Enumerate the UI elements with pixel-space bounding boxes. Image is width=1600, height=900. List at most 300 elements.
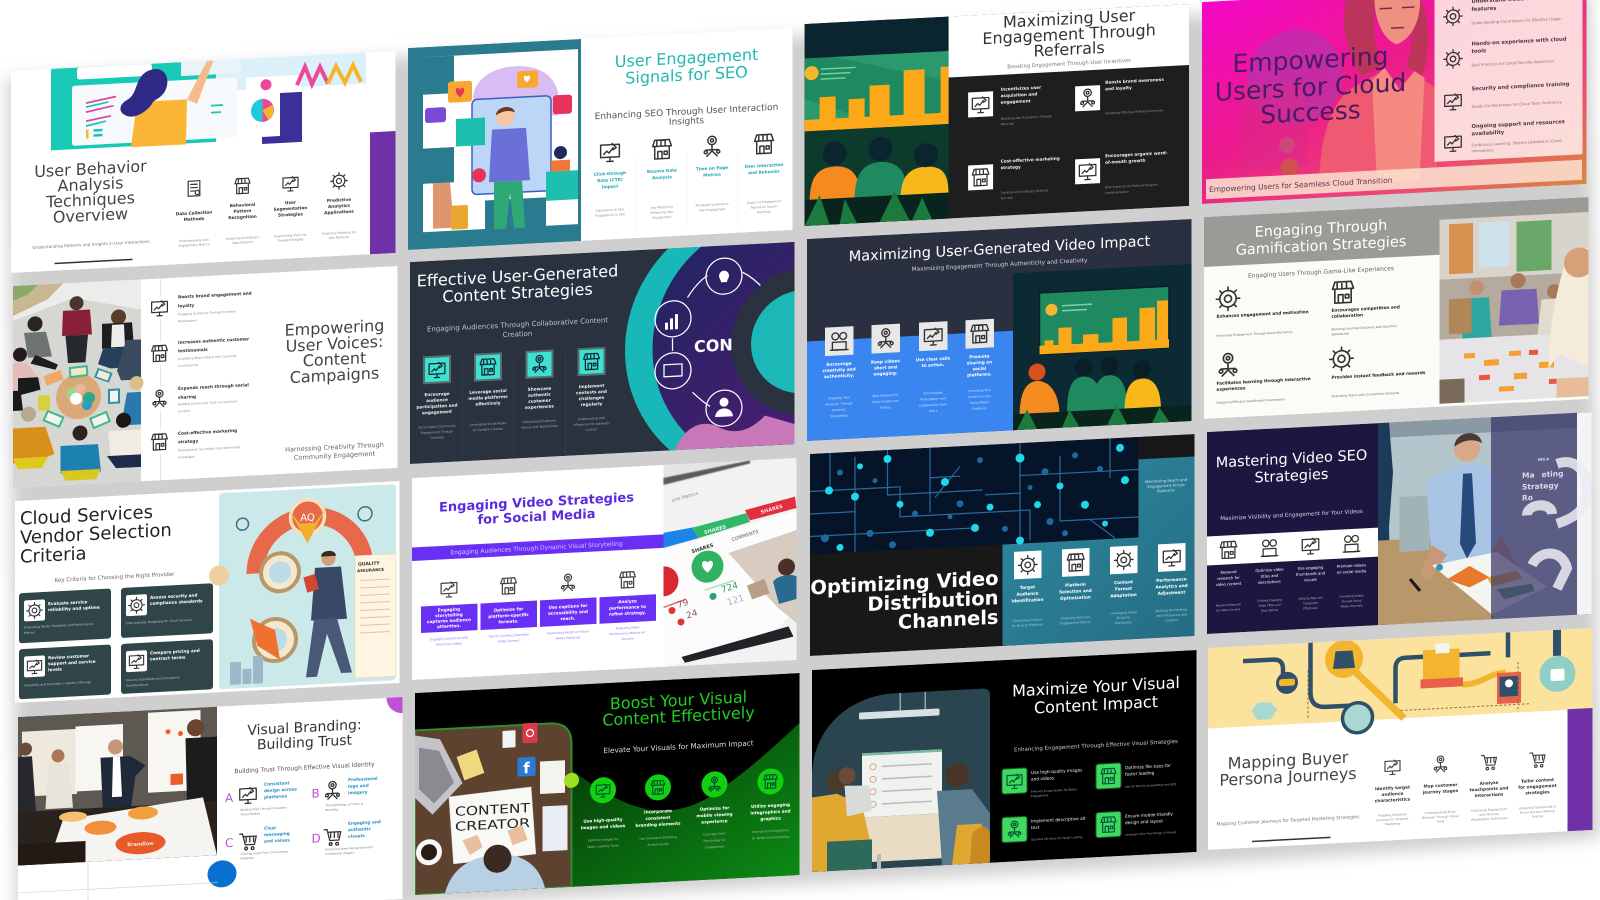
slide: Cloud Services Vendor Selection Criteria	[15, 481, 400, 703]
tactic columns: Engaging	[438, 607, 460, 614]
tip columns: Incorporate	[644, 809, 672, 816]
image: audience watching bar chart	[805, 17, 949, 226]
image: social metrics screen: 79	[676, 598, 690, 611]
tip columns: creativity and	[822, 366, 856, 374]
list items: Ongoing support and resources	[1472, 119, 1565, 130]
channel columns: Performance	[1156, 577, 1187, 584]
step columns: audience	[1382, 791, 1403, 798]
photo: presenter at a desk	[1378, 412, 1592, 625]
corner accent	[386, 680, 418, 714]
accent line	[54, 259, 132, 264]
card: support: Scalability and Flexibility in Vendor Offerings	[24, 680, 92, 688]
title: Empowering	[285, 316, 384, 340]
step columns: through Social	[1342, 598, 1362, 604]
metric columns: User Engagement	[699, 207, 726, 212]
tip columns: Engaging Your	[828, 395, 850, 400]
step columns: Promote videos	[1337, 563, 1366, 569]
benefit grid: experiences	[1216, 385, 1246, 393]
tip columns: Keep videos	[871, 359, 900, 366]
lettered items: platforms	[264, 793, 288, 801]
strategy columns: contests and	[576, 389, 607, 396]
tip grid: Use high-quality images	[1031, 768, 1082, 776]
channel columns: Analytics and	[1155, 583, 1188, 591]
metric columns	[594, 133, 783, 233]
panel: teal image column	[408, 39, 581, 250]
feature columns: Predictive Modeling for	[322, 230, 356, 236]
list items: testimonials	[178, 347, 208, 354]
photo: content creator desk: CREATOR	[455, 815, 530, 834]
benefit grid: Facilitates learning through interactive	[1216, 377, 1311, 387]
benefit grid: Enhances engagement and motivation	[1216, 309, 1309, 320]
step columns: Journeys for Targeted	[1376, 817, 1409, 822]
subtitle: Creation	[503, 330, 532, 339]
feature columns: Predictive	[327, 198, 351, 204]
photo: team meeting room	[812, 688, 990, 872]
step columns: Categories	[1303, 601, 1318, 606]
illustration: quality assurance figure: ASSURANCE	[357, 567, 384, 573]
feature columns: Methods	[184, 216, 205, 223]
tip columns: short and	[874, 364, 897, 372]
subtitle: Engaging Audiences Through Collaborative Content	[427, 316, 608, 334]
list items: Best Practices for Cloud Security Awareness	[1472, 59, 1554, 67]
illustration: journey map	[1208, 627, 1592, 740]
step columns: Analyzing Touchpoints in	[1519, 804, 1556, 810]
slide: Empowering Users for Cloud Success	[1202, 0, 1586, 204]
title: Vendor Selection	[20, 520, 172, 549]
benefit grid: Designing Effective Referral Incentives	[1105, 108, 1164, 115]
panel: translucent list panel	[1434, 0, 1582, 162]
step columns: Video Titles and	[1259, 603, 1281, 608]
lettered items: Branding	[326, 807, 338, 812]
benefit grid: Boosting User Acquisition Through	[1001, 114, 1052, 121]
benefit grid	[968, 77, 1168, 202]
step columns: thumbnails and	[1296, 571, 1326, 577]
tactic columns: Analyze	[618, 599, 637, 605]
list items: Understanding Cloud Basics for Effective Usage	[1472, 17, 1562, 25]
metric columns: Analysis	[652, 174, 672, 181]
tip columns: Audience Through	[825, 401, 853, 407]
strategy columns: effectively	[475, 400, 501, 408]
tactic columns: Success	[621, 636, 634, 641]
list items: loyalty	[178, 303, 194, 309]
card: security: compliance standards	[150, 598, 203, 607]
tip columns: images and videos	[581, 823, 626, 831]
feature columns: Engagement Metrics	[179, 242, 210, 248]
step columns: Marketing	[1385, 822, 1400, 826]
tip grid: Implement descriptive alt	[1031, 817, 1086, 825]
tip columns: authenticity.	[824, 373, 855, 380]
panel: white title header	[949, 4, 1189, 78]
list items: Content	[178, 409, 191, 413]
subtitle: Insights	[669, 116, 704, 128]
subtitle: Enhancing SEO Through User Interaction	[595, 103, 778, 122]
strategy columns: regularly	[581, 401, 603, 408]
card: reliability: Metrics	[24, 630, 35, 635]
step columns: Crafting Engaging	[1257, 598, 1282, 603]
benefit grid: Best Practices for Referral Program	[1105, 183, 1158, 189]
step columns: research for	[1217, 576, 1240, 581]
panel: teal column	[1002, 457, 1194, 646]
title: User Voices:	[286, 332, 383, 356]
subtitle: Harnessing Creativity Through	[285, 441, 384, 454]
card: reliability: Evaluate service	[48, 600, 87, 607]
lettered items: logo and	[348, 783, 369, 790]
list items: Hands-On Workshops for Cloud Tools Proficiency	[1472, 100, 1563, 109]
strategy columns: media platforms	[468, 394, 508, 402]
title: Analysis	[58, 173, 123, 196]
tip columns: branding elements	[635, 821, 681, 829]
strategy columns: engagement	[422, 409, 452, 416]
tactic columns	[421, 570, 656, 652]
list items: Boosts brand engagement and	[178, 292, 252, 300]
card: reliability: reliability and uptime	[48, 605, 100, 613]
lettered items: A	[225, 791, 234, 805]
title: Maximize Your Visual	[1012, 673, 1180, 701]
tip columns: Promote	[969, 355, 990, 361]
lettered items: Consistent	[264, 781, 290, 788]
tip columns: sharing on	[967, 359, 992, 367]
step columns: Effectively	[1303, 606, 1318, 610]
metric columns: Metrics	[703, 172, 721, 179]
channel columns: Platform	[1065, 583, 1086, 589]
lettered items: Professional	[348, 777, 378, 783]
card: security: Cost Analysis: Budgeting for Cloud Services	[126, 618, 192, 625]
image: social metrics screen: SHARES	[691, 543, 715, 555]
illustration: woman at analytics dashboard	[51, 53, 366, 155]
feature columns: Recognition	[228, 214, 257, 221]
photo: content creator desk	[415, 721, 572, 895]
lettered items: Reliability	[240, 856, 254, 860]
title: Empowering	[1233, 41, 1388, 78]
title: Content Impact	[1034, 692, 1158, 717]
title: Optimizing Video	[810, 567, 998, 599]
step columns: Mapping Customer	[1378, 812, 1407, 818]
lettered items: and values	[264, 837, 290, 845]
channel columns: Optimizing Content	[1013, 617, 1042, 623]
feature columns: Understanding User	[179, 238, 209, 243]
feature columns: Data Patterns	[232, 240, 253, 245]
tip grid	[1002, 760, 1177, 843]
title: Maximizing User-Generated Video Impact	[849, 234, 1151, 265]
tactic columns: refine strategy.	[609, 610, 646, 618]
metric columns: Rankings	[757, 210, 771, 214]
channel columns: Selection and	[1059, 588, 1092, 596]
list items: Campaigns	[178, 455, 195, 459]
step columns: visuals	[1304, 578, 1317, 582]
tip columns: Editing	[880, 405, 891, 410]
step columns: characteristics	[1375, 796, 1411, 804]
metric columns: and Behavior	[748, 169, 781, 176]
tip columns: Storytelling	[830, 413, 848, 418]
subtitle: Elevate Your Visuals for Maximum Impact	[603, 738, 754, 755]
benefit grid: Cost-effective marketing	[1001, 157, 1060, 165]
subtitle: Engaging Audiences Through Dynamic Visual Storytelling	[450, 541, 623, 557]
benefit grid: Referrals	[1001, 122, 1014, 126]
title: Signals for SEO	[625, 62, 748, 88]
strategy columns: Showcasing Customer	[523, 418, 556, 424]
image: social metrics screen: SHARES	[760, 504, 784, 516]
tip columns: Best Practices for	[872, 393, 899, 398]
feature columns: Segmenting Users for	[274, 233, 307, 238]
list items: Building Community Trust via Authentic	[178, 399, 237, 406]
list items: Increases authentic customer	[178, 337, 249, 346]
tip columns: Use clear calls	[916, 357, 950, 363]
step columns: Process	[1532, 814, 1544, 819]
step columns: journey stages	[1422, 788, 1459, 796]
tip columns: Psychology for	[704, 838, 726, 843]
step columns: Tailor content	[1521, 778, 1554, 785]
metric columns: Engagement	[652, 215, 672, 220]
title: Campaigns	[290, 363, 379, 387]
tactic columns: attention.	[437, 623, 461, 630]
photo: team at branding workshop: Brandlow	[127, 841, 154, 848]
slide: Empowering User Voices: Content Campaigns	[13, 266, 398, 488]
title: Engaging Through	[1255, 218, 1387, 241]
tip columns: Encouraging	[924, 390, 942, 395]
lettered items: messaging	[264, 831, 290, 838]
strategy columns: Implement	[579, 384, 604, 390]
subtitle: Engaging Users Through Game-Like Experiences	[1248, 265, 1394, 280]
channel columns: Engagement Metrics	[1060, 620, 1091, 625]
benefit grid: Success	[1001, 196, 1013, 200]
list items: sharing	[178, 394, 196, 401]
tip columns: Incorporate Infographics	[752, 828, 789, 834]
vertical divider	[160, 278, 161, 480]
strategy columns: Leverage social	[469, 389, 507, 396]
strategy columns: experiences	[525, 403, 554, 411]
metric columns: Strategies to Enhance	[695, 202, 729, 208]
tip columns: Social Media	[970, 400, 989, 405]
step columns: Tools	[1436, 819, 1445, 824]
step columns: Enhancing Engagement	[1471, 807, 1507, 813]
step columns: Utilizing Tags and	[1298, 595, 1323, 601]
step columns: Optimize video	[1255, 568, 1284, 573]
title: Users for Cloud	[1215, 68, 1406, 107]
list items: Cost-effective marketing	[178, 429, 237, 437]
photo: team at branding workshop	[18, 707, 217, 866]
step columns: on social media	[1337, 569, 1366, 575]
card: security: Assess security and	[150, 594, 197, 601]
slide: Effective User-Generated Content Strategies	[410, 242, 794, 464]
image: social metrics screen: SHARES	[704, 524, 727, 536]
tactic columns: Short-Form Video	[436, 641, 462, 647]
tip columns: Leverage Color	[703, 831, 726, 837]
metric columns: Click-through	[594, 171, 626, 178]
list items: Hands-on experience with cloud	[1472, 37, 1567, 47]
photo: presenter at a desk: Ro	[1522, 493, 1533, 503]
title: Building Trust	[257, 733, 353, 754]
tactic columns: Maximizing Reach on Social	[547, 629, 589, 635]
benefit grid: Approaches	[1332, 331, 1350, 336]
metric columns: Measuring User	[650, 210, 674, 215]
lettered items: D	[312, 831, 321, 846]
lettered items: Enhancing Brand Recognition with	[326, 845, 373, 852]
channel columns: Leveraging Social	[1110, 610, 1137, 615]
tactic columns: accessibility and	[548, 609, 588, 617]
image: audience watching chart	[1013, 264, 1192, 430]
step columns: Identify target	[1375, 785, 1410, 792]
feature columns: Segmentation	[274, 205, 307, 213]
image: social metrics screen: 24	[685, 608, 699, 622]
step columns: Analyze	[1480, 781, 1498, 787]
benefit grid: Provides instant feedback and rewards	[1332, 370, 1426, 381]
strategy columns: authentic	[528, 392, 551, 399]
title: Cloud Services	[20, 502, 153, 530]
card: pricing: Security Standards and Compliance	[126, 675, 180, 682]
tip columns: Encourage	[826, 362, 852, 368]
feature columns: User	[285, 201, 296, 206]
tip grid: Use Alt Text for Accessibility and SEO	[1125, 782, 1177, 789]
tip columns: Use high-quality	[583, 818, 623, 825]
channel columns: Target	[1020, 585, 1035, 591]
step columns: Promoting Videos	[1339, 593, 1364, 599]
panel: subtitle strip	[1206, 160, 1582, 199]
title: Distribution	[867, 586, 998, 616]
strategy columns: Showcase	[528, 387, 551, 393]
lettered items: visuals	[348, 833, 365, 840]
tactic columns: formats.	[498, 618, 519, 626]
tip columns	[822, 319, 994, 419]
channel columns: Creators	[1165, 618, 1178, 623]
channel columns: Analyzing Audience	[1061, 615, 1090, 620]
strategy columns: challenges	[579, 395, 605, 402]
benefit grid: Boosts brand awareness	[1105, 78, 1164, 86]
strategy columns: participation and	[416, 403, 458, 411]
lettered items: Building Trust Through Consistent	[240, 806, 287, 812]
tip columns: Optimize Images for	[588, 837, 618, 843]
title: Visual Branding:	[247, 717, 362, 739]
lettered items: imagery	[348, 789, 368, 796]
photo: team playing board game	[1440, 212, 1594, 404]
strategy columns: Encouraging Community	[418, 424, 456, 430]
title: Engaging Video Strategies	[439, 490, 634, 516]
step columns: descriptions	[1258, 580, 1281, 585]
feature columns: Analyzing Clickstream	[226, 235, 259, 241]
image: content cycle circle	[625, 242, 794, 450]
list items: availability	[1472, 130, 1505, 137]
benefit grid: Motivating Teams with Competitive Elements	[1332, 391, 1400, 398]
panel: blue band	[807, 331, 1016, 441]
step columns: Map customer	[1423, 783, 1458, 790]
slide: User Engagement Signals for SEO	[408, 28, 792, 250]
tactic columns: Engaging Audiences with	[430, 636, 468, 642]
tactic columns: reach.	[560, 615, 576, 622]
card: pricing: contract terms	[150, 655, 186, 662]
image: social metrics screen: Link Metrics	[671, 491, 699, 504]
title: User Behavior	[34, 156, 147, 181]
list items: strategy	[178, 438, 198, 445]
image: social metrics screen: COMMENTS	[731, 529, 759, 543]
title: Overview	[53, 204, 128, 227]
tip columns: consistent	[646, 815, 670, 822]
slide: Engaging Video Strategies for Social Media	[412, 458, 796, 680]
title: Success	[1260, 95, 1361, 129]
title: Strategies	[1254, 467, 1329, 487]
tip columns: Engagement	[705, 844, 725, 849]
tip columns: experience	[701, 818, 728, 826]
tactic columns: Tips for Creating Shareable	[488, 632, 529, 639]
tip grid: text	[1031, 825, 1040, 831]
metric columns: Signals on Search	[751, 204, 777, 210]
subtitle: Boosting Engagement Through User Incentives	[1007, 58, 1131, 70]
step columns: touchpoints and	[1470, 785, 1508, 793]
tip grid: Enhance Image Quality for Better	[1031, 787, 1077, 794]
tip columns: Users	[929, 409, 938, 413]
subtitle: Understanding Patterns and Insights in User Interactions	[32, 239, 150, 250]
step columns: with Persona	[1479, 812, 1499, 817]
subtitle: Empowering Users for Seamless Cloud Transition	[1209, 176, 1393, 194]
tip grid: Engagement	[1031, 793, 1049, 798]
tip columns: infographics and	[750, 808, 791, 817]
panel: purple side bar	[1568, 708, 1592, 831]
slide: Maximize Your Visual Content Impact	[812, 650, 1196, 872]
lettered items	[225, 776, 381, 861]
step columns: Media Channels	[1341, 603, 1363, 609]
title: Effective User-Generated	[417, 261, 618, 291]
slide: Mastering Video SEO Strategies	[1207, 412, 1592, 634]
image: social metrics screen: 121	[726, 594, 745, 608]
tip columns: Optimize for	[700, 806, 729, 813]
subtitle: Key Criteria for Choosing the Right Provider	[55, 572, 175, 584]
card: pricing: Compare pricing and	[150, 649, 200, 656]
image: social metrics screen	[664, 458, 796, 667]
feature columns: Applications	[324, 209, 354, 216]
strategy columns: Contests	[430, 435, 444, 440]
photo: content creator desk: f	[523, 759, 530, 777]
feature columns	[176, 172, 357, 248]
metric columns: Rate (CTR)	[597, 177, 623, 184]
feature columns: User Behavior	[328, 235, 350, 240]
tip columns	[581, 767, 791, 856]
benefit grid: Encourages competition and	[1332, 305, 1400, 314]
benefit grid: Incentivizes user	[1001, 86, 1041, 93]
benefit grid	[1216, 277, 1426, 405]
subtitle: Mapping Customer Journeys for Targeted Marketing Strategies	[1216, 814, 1360, 828]
tactic columns: Media Platforms	[556, 635, 581, 641]
title: Content Strategies	[442, 280, 593, 306]
subtitle: Enhancing Engagement Through Effective Visual Strategies	[1014, 739, 1178, 753]
channel columns: for Diverse Platforms	[1012, 622, 1044, 628]
benefit grid: Enhancing Engagement Through Game Mechanics	[1216, 330, 1293, 338]
benefit grid: strategy	[1001, 164, 1021, 171]
lettered items: Visual Identity	[240, 811, 260, 816]
metric columns: User Interaction	[745, 163, 783, 170]
metric columns: Key Metrics for	[651, 205, 673, 210]
tip columns: to action.	[922, 362, 945, 369]
step columns: Keyword Research	[1216, 602, 1241, 608]
card: security	[121, 583, 213, 638]
tactic columns: Optimize for	[494, 607, 523, 614]
step columns: Use engaging	[1298, 565, 1323, 571]
subtitle: Engagement Across	[1147, 483, 1185, 489]
card: support: support and service	[48, 659, 96, 667]
lettered items: Creating Logos That Communicate	[240, 849, 288, 856]
photo: presenter at a desk: Ma eting	[1522, 469, 1563, 480]
subtitle: Community Engagement	[294, 450, 375, 462]
list items: Expands reach through social	[178, 383, 249, 392]
strategy columns: customer	[528, 398, 552, 405]
metric columns: Bounce Rate	[647, 169, 677, 175]
tip columns: Utilize engaging	[751, 803, 790, 810]
channel columns: with Influencers and	[1156, 612, 1187, 618]
tip grid: Optimize file sizes for	[1125, 764, 1171, 771]
step columns: titles and	[1261, 574, 1279, 579]
channel columns: Media for	[1116, 615, 1131, 620]
card: reliability: Evaluating Vendor Reliability and Performance	[24, 622, 94, 630]
step columns: Visualization Techniques	[1471, 816, 1508, 822]
feature columns: Behavioral	[230, 203, 255, 209]
tip columns: Platforms	[972, 406, 987, 411]
